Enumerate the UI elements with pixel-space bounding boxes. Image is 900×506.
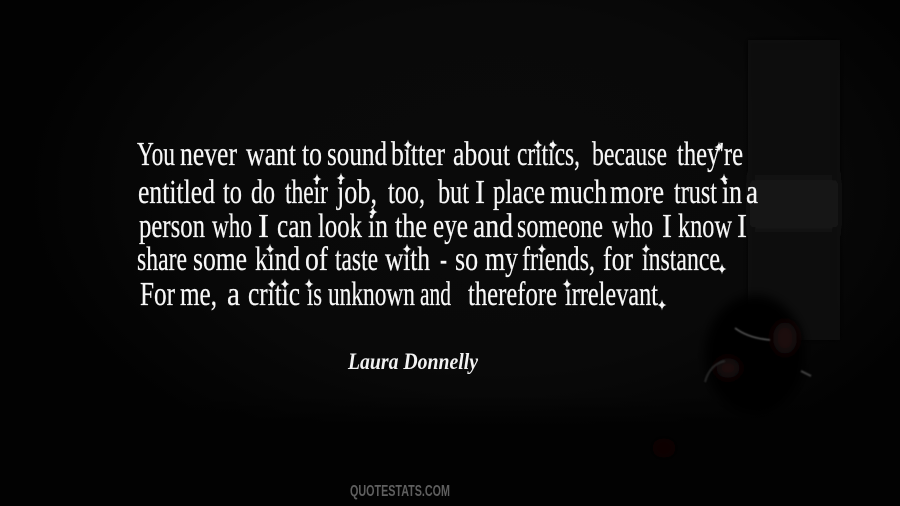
- quote text: instance: [642, 241, 720, 278]
- quote text: know: [678, 208, 732, 245]
- quote text: can: [277, 208, 312, 245]
- quote text: taste: [335, 241, 378, 278]
- quote text: more: [610, 174, 664, 211]
- quote text: me,: [180, 276, 217, 313]
- quote text: I: [662, 208, 672, 245]
- quote text: critic: [248, 276, 300, 313]
- quote text: unknown: [328, 276, 415, 313]
- quote text: entitled: [138, 174, 215, 211]
- quote text: -: [440, 241, 447, 278]
- quote text: I: [737, 208, 747, 245]
- quote text: to: [302, 136, 322, 173]
- quote text: for: [603, 241, 634, 278]
- quote text: I: [258, 208, 269, 245]
- quote text: job,: [336, 174, 377, 211]
- quote text: because: [592, 136, 667, 173]
- quote text: to: [223, 174, 242, 211]
- quote text: do: [251, 174, 275, 211]
- quote text: someone: [517, 208, 603, 245]
- quote text: eye: [433, 208, 468, 245]
- author name: Laura Donnelly: [347, 349, 479, 374]
- quote text: about: [453, 136, 510, 173]
- quote text: kind: [255, 241, 300, 278]
- quote text: trust: [674, 174, 717, 211]
- quote text: never: [180, 136, 238, 173]
- quote text: therefore: [468, 276, 557, 313]
- quote text: they're: [677, 136, 743, 173]
- quote text: critics,: [517, 136, 580, 173]
- quote text: bitter: [391, 136, 445, 173]
- quote text: is: [307, 276, 322, 313]
- quote text: and: [473, 208, 513, 245]
- quote text: [137, 136, 758, 313]
- quote text: too,: [388, 174, 425, 211]
- figure: seated person in the shadows: [652, 295, 811, 458]
- quote text: want: [246, 136, 296, 173]
- quote text: a: [227, 276, 240, 313]
- quote text: my: [485, 241, 518, 278]
- quote text: share: [137, 241, 187, 278]
- quote text: look: [318, 208, 362, 245]
- quote text: For: [140, 276, 176, 313]
- quote text: I: [475, 174, 485, 211]
- quote text: in: [368, 208, 388, 245]
- quote text: some: [193, 241, 247, 278]
- quote text: sound: [327, 136, 387, 173]
- sparkle accents on the lettering: [266, 140, 728, 310]
- quote text: of: [305, 241, 329, 278]
- quote text: You: [137, 136, 175, 173]
- quote text: much: [550, 174, 607, 211]
- quote text: irrelevant: [565, 276, 658, 313]
- quote text: with: [385, 241, 430, 278]
- quote text: place: [493, 174, 545, 211]
- quote text: in: [722, 174, 742, 211]
- quote text: who: [612, 208, 653, 245]
- quote text: person: [139, 208, 205, 245]
- quote text: but: [438, 174, 469, 211]
- quote text: the: [395, 208, 427, 245]
- quote text: friends,: [522, 241, 595, 278]
- quote text: their: [285, 174, 328, 211]
- quote text: so: [455, 241, 478, 278]
- quote text: a: [746, 174, 758, 211]
- quote text: and: [420, 276, 451, 313]
- watermark: QUOTESTATS.COM: [350, 483, 450, 500]
- quote text: who: [212, 208, 252, 245]
